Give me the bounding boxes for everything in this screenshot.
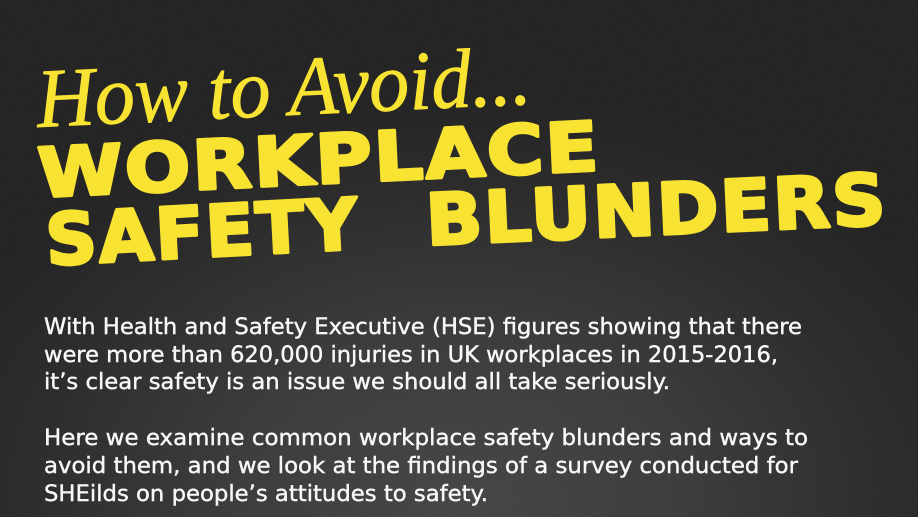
title: safety: SAFETY [44,183,361,282]
intro paragraph [44,315,802,395]
intro paragraph: it’s clear safety is an issue we should all take seriously. [44,370,670,395]
title: blunders: BLUNDERS [424,158,889,262]
survey paragraph: SHEilds on people’s attitudes to safety. [44,482,488,507]
survey paragraph [44,426,808,507]
survey paragraph: avoid them, and we look at the findings of a survey conducted for [44,454,799,479]
intro paragraph: were more than 620,000 injuries in UK workplaces in 2015-2016, [44,343,778,368]
survey paragraph: Here we examine common workplace safety blunders and ways to [44,426,808,451]
title: workplace: WORKPLACE [36,108,602,214]
title [34,30,889,282]
intro paragraph: With Health and Safety Executive (HSE) figures showing that there [44,315,802,340]
title: script line: How to Avoid... [34,30,533,146]
